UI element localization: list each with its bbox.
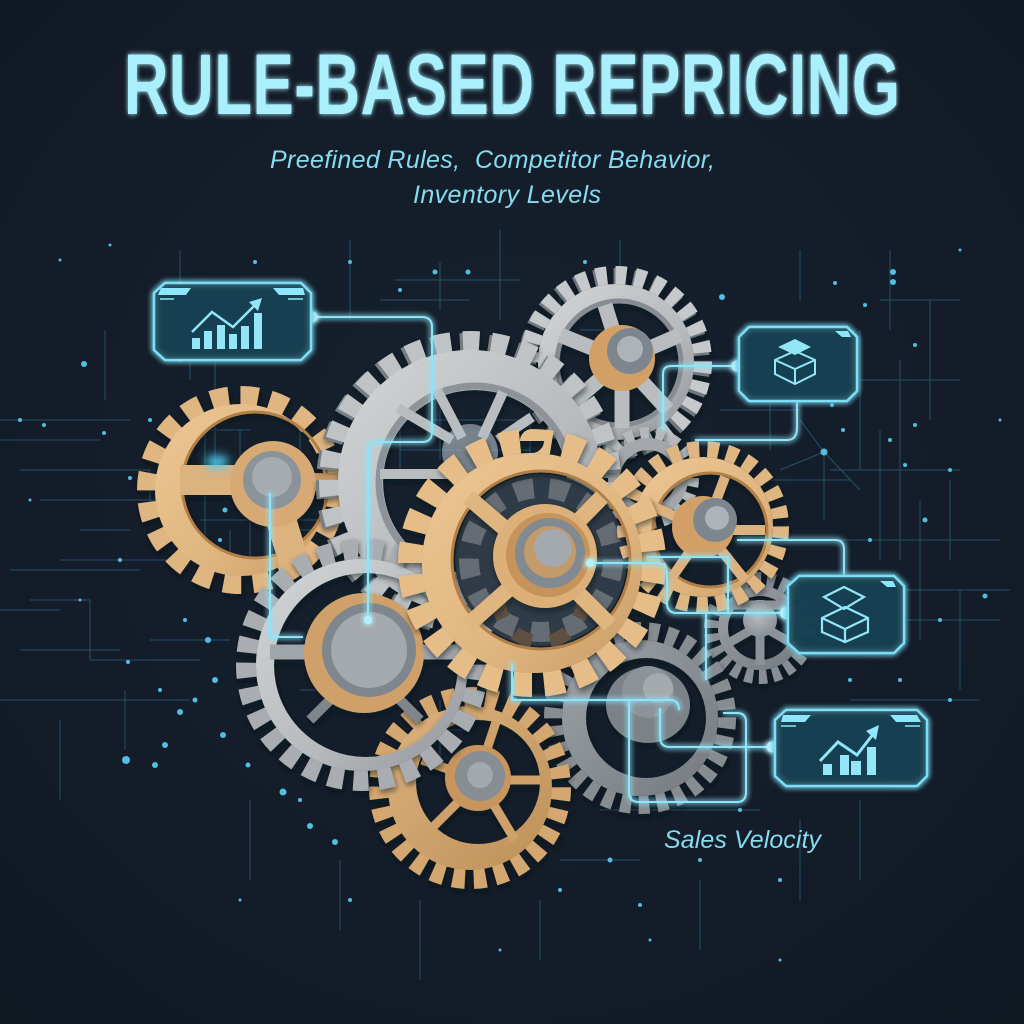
label: sales velocity: Sales Velocity — [664, 826, 822, 854]
panel: bottom-right chart — [775, 710, 927, 786]
data particles — [18, 244, 1002, 962]
gear: left tan — [147, 396, 345, 584]
panel: top-left chart — [154, 283, 311, 360]
gear: right tan — [625, 449, 781, 605]
subtitle: Inventory Levels — [413, 181, 601, 209]
subtitle — [270, 146, 715, 209]
title: RULE-BASED REPRICING — [124, 36, 900, 132]
icon: box — [775, 339, 815, 384]
gear: lower left gray — [246, 549, 478, 781]
hidden gears behind center — [455, 474, 627, 646]
gear: bottom tan — [379, 697, 561, 879]
icon: chart — [192, 298, 262, 349]
icon: box — [822, 587, 868, 642]
gear: large gray — [326, 341, 611, 625]
icon: chart — [820, 725, 879, 775]
panel: top-right box — [739, 327, 857, 401]
circuit background lines — [0, 230, 1010, 980]
gear: lower right gray — [553, 631, 727, 805]
gear: center tan — [410, 441, 654, 685]
connector nodes — [306, 312, 792, 752]
subtitle: Preefined Rules, Competitor Behavior, — [270, 146, 715, 174]
gear: small right gray — [711, 579, 809, 677]
glow chip on left gear — [207, 456, 227, 468]
glowing connectors — [270, 317, 844, 802]
gear: small middle gray — [604, 434, 692, 522]
gear: top right gray — [527, 275, 703, 451]
panel: middle-right box — [788, 576, 904, 653]
